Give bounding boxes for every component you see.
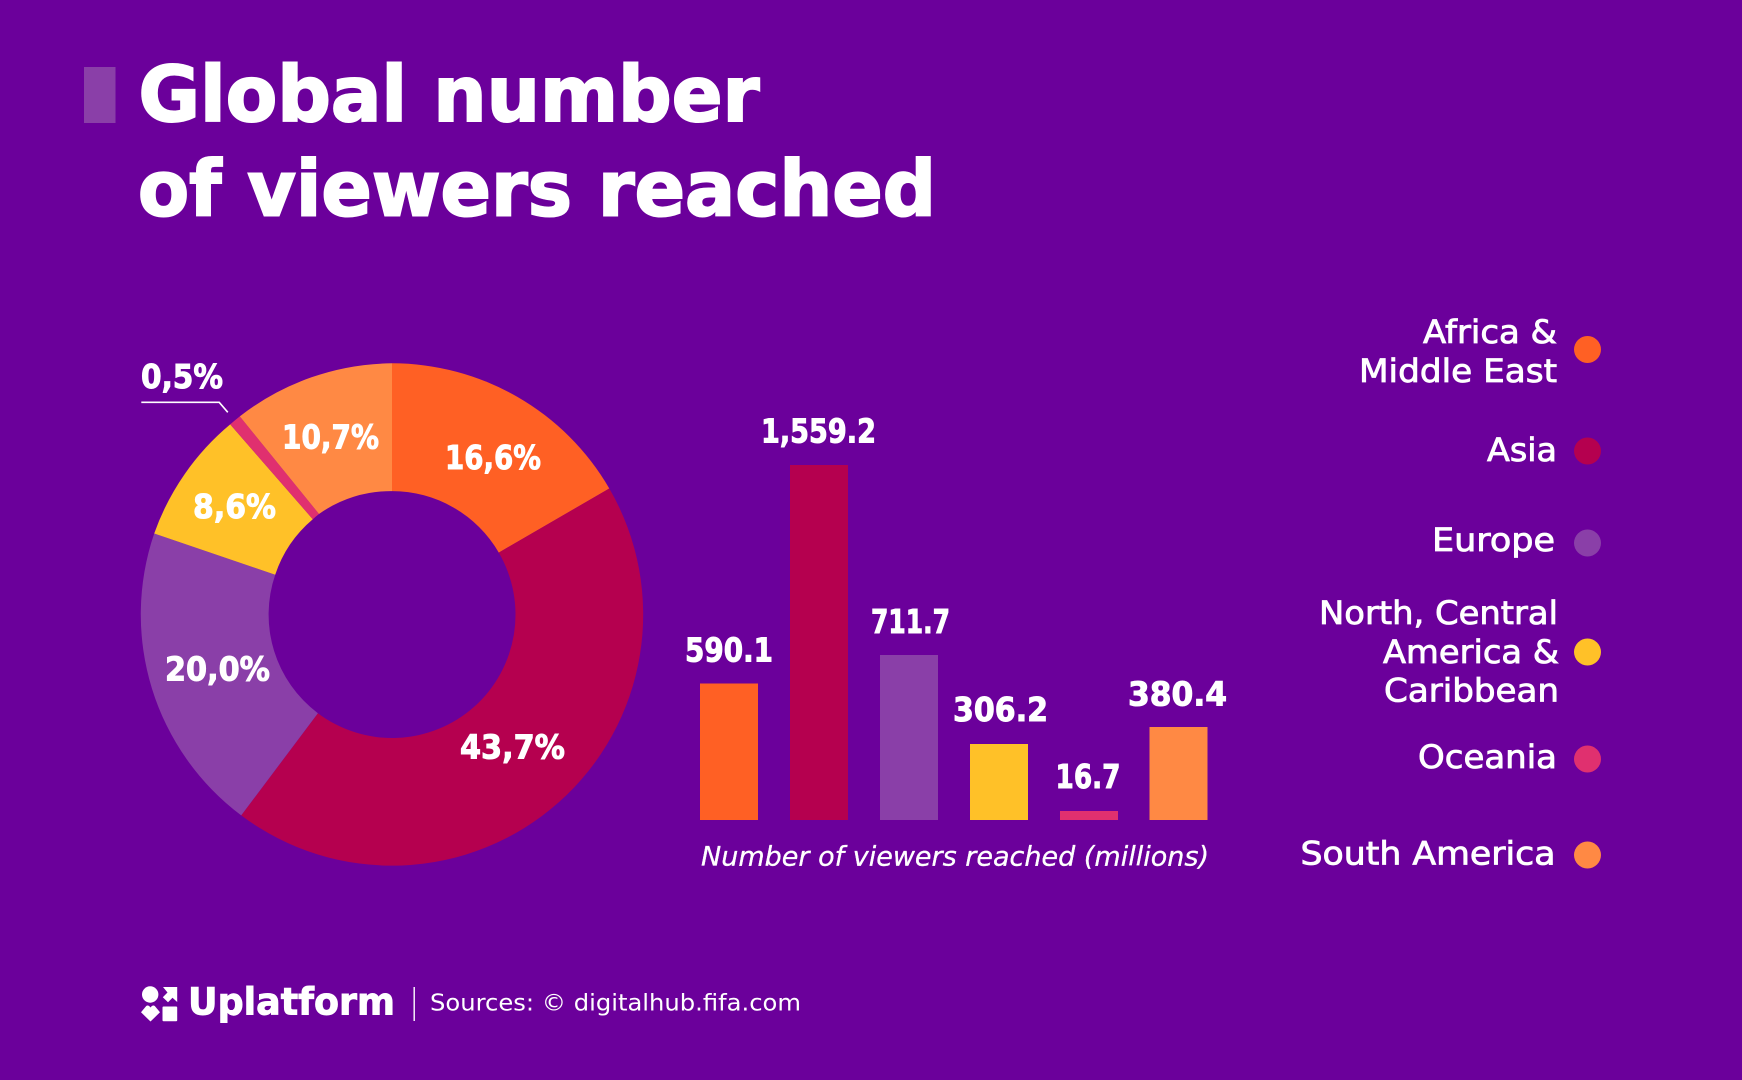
- legend item: North, Central America & Caribbean: [1319, 594, 1601, 710]
- legend item: North, Central America & Caribbean: America &: [1383, 633, 1559, 671]
- icon: Uplatform logo: [141, 986, 177, 1022]
- bar: Oceania: [1060, 811, 1118, 820]
- title: of viewers reached: [138, 146, 936, 234]
- bar: Africa & Middle East: [700, 684, 758, 820]
- title: Global number: [138, 51, 760, 140]
- value: 590.1: 590.1: [685, 630, 773, 670]
- label: 20,0%: 20,0%: [165, 650, 270, 688]
- title: [138, 51, 936, 234]
- bar: South America: [1150, 727, 1208, 820]
- segment: Asia 43,7%: [241, 488, 643, 866]
- legend: [1300, 313, 1601, 872]
- label: 43,7%: 43,7%: [460, 728, 565, 766]
- legend item: Asia: [1487, 431, 1601, 469]
- label: 16,6%: 16,6%: [445, 438, 541, 477]
- legend item: South America: South America: [1300, 834, 1556, 872]
- bar: Asia: [790, 465, 848, 820]
- legend item: Oceania: Oceania: [1418, 738, 1557, 776]
- title accent block: [84, 67, 116, 123]
- legend item: Africa & Middle East: Africa &: [1423, 313, 1557, 351]
- leader line for 0,5%: [141, 402, 228, 412]
- value: 711.7: 711.7: [871, 602, 950, 641]
- legend item: Africa & Middle East: [1359, 313, 1601, 390]
- footer: [141, 980, 801, 1024]
- bar: North, Central America & Caribbean: [970, 744, 1028, 820]
- legend item: Asia: Asia: [1487, 431, 1557, 469]
- segment: Europe 20,0%: [141, 534, 318, 815]
- value: 380.4: 380.4: [1128, 674, 1227, 714]
- value: 16.7: 16.7: [1056, 757, 1120, 796]
- segment: South America 10,7%: [240, 363, 392, 514]
- legend item: North, Central America & Caribbean: North, Central: [1319, 594, 1558, 632]
- legend item: North, Central America & Caribbean: Caribbean: [1384, 672, 1559, 710]
- separator: [414, 987, 415, 1021]
- brand name: Uplatform: [188, 980, 395, 1024]
- segment: North, Central America & Caribbean 8,6%: [154, 424, 313, 575]
- bar chart: viewers reached in millions: [685, 412, 1227, 872]
- value: 306.2: 306.2: [953, 690, 1048, 729]
- donut chart: share by region: [141, 357, 643, 866]
- label: 10,7%: 10,7%: [282, 418, 379, 456]
- segment: Africa & Middle East 16,6%: [392, 363, 609, 553]
- bar: Europe: [880, 655, 938, 820]
- label: 0,5%: 0,5%: [141, 357, 223, 396]
- label: 8,6%: 8,6%: [193, 487, 276, 526]
- value: 1,559.2: 1,559.2: [761, 412, 876, 450]
- segment: Oceania 0,5%: [230, 416, 319, 519]
- source text: Sources: © digitalhub.fifa.com: [430, 988, 801, 1016]
- axis caption: Number of viewers reached (millions): [701, 842, 1209, 872]
- legend item: Africa & Middle East: Middle East: [1359, 352, 1557, 390]
- legend item: Europe: Europe: [1432, 521, 1555, 559]
- legend item: Europe: [1432, 521, 1601, 559]
